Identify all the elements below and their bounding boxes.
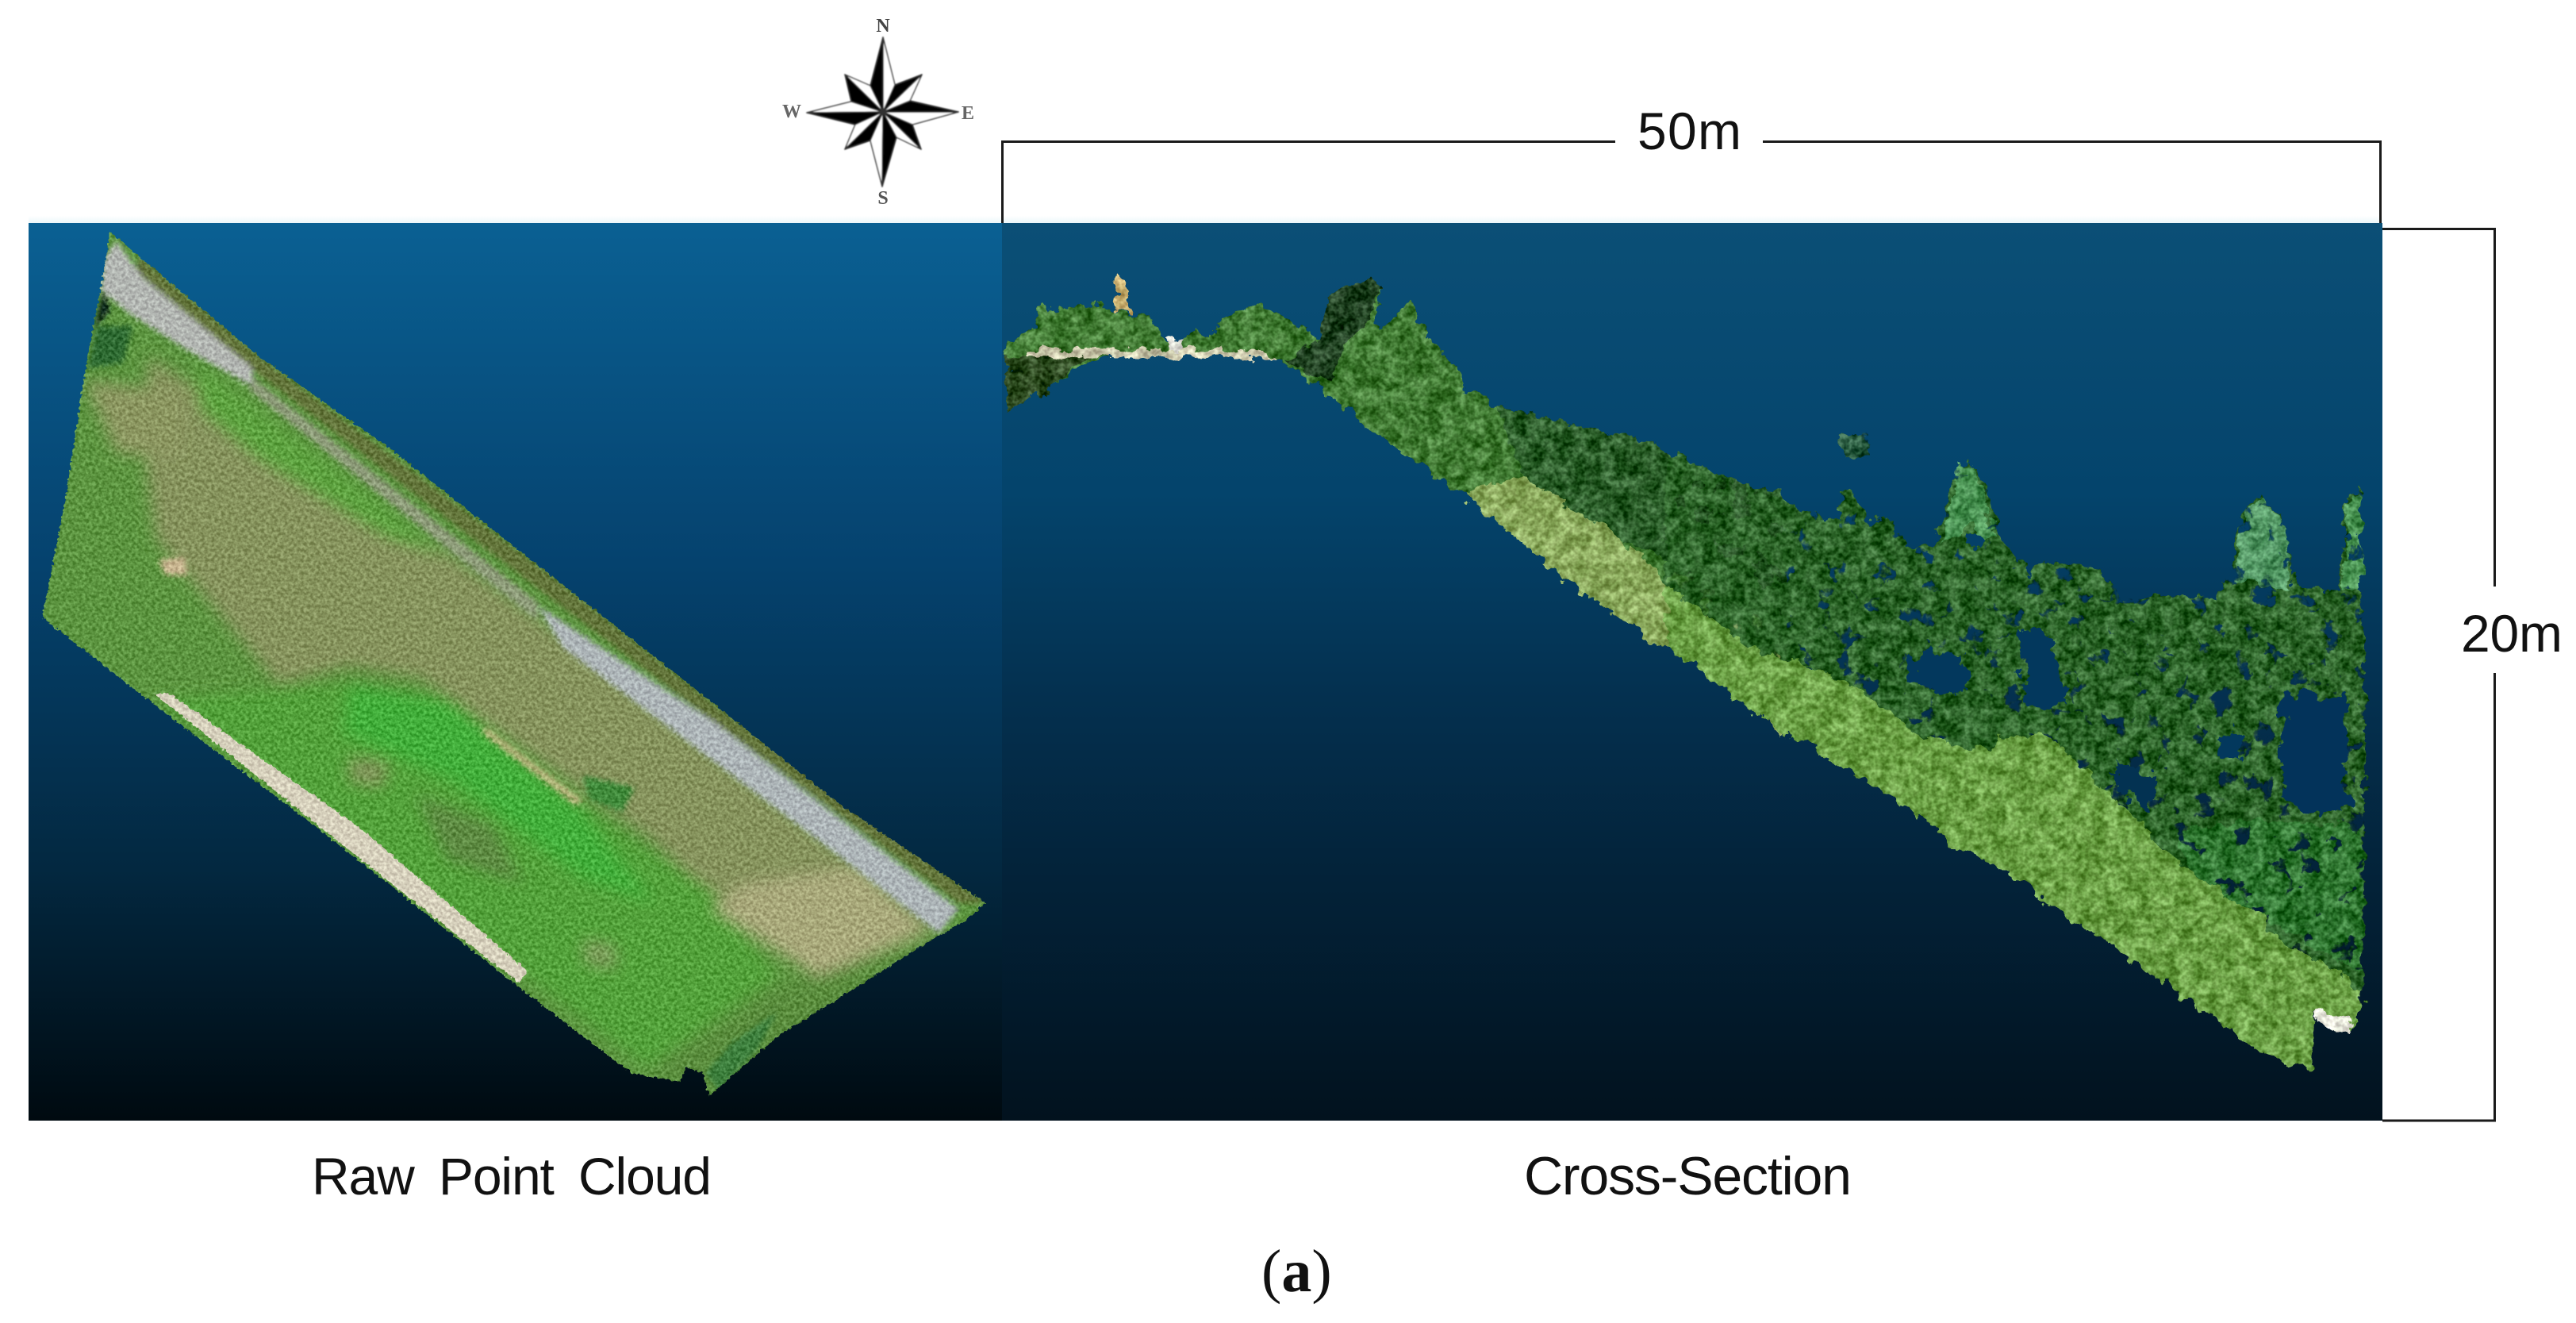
image: cross-section lower grassy slope [1666, 584, 2363, 1070]
dimension bracket: 50m width [1003, 102, 2380, 223]
image: cross-section upper vegetation and trees [1666, 433, 2365, 1002]
dimension bracket: 20m height: 20m [2461, 604, 2563, 663]
icon: compass rose: N [876, 16, 890, 37]
dimension bracket: 20m height [2382, 229, 2563, 1121]
icon: compass rose: W [782, 102, 801, 122]
label: Raw Point Cloud: Raw Point Cloud [312, 1147, 712, 1206]
image: raw point cloud top-down terrain [26, 223, 997, 1103]
image: cross-section canopy gaps [1910, 527, 2345, 815]
dimension bracket: 50m width: 50m [1637, 102, 1741, 160]
icon: compass rose [782, 16, 974, 209]
label: figure part (a): (a) [1261, 1238, 1332, 1305]
panel: cross-section background [1002, 223, 2382, 1121]
panel: raw point cloud background [29, 223, 1002, 1121]
icon: compass rose: S [877, 188, 889, 209]
label: Cross-Section: Cross-Section [1524, 1146, 1852, 1206]
icon: compass rose: E [962, 103, 974, 124]
haze above panels [29, 216, 2382, 224]
image: cross-section left crest and slope [1007, 275, 2365, 1070]
